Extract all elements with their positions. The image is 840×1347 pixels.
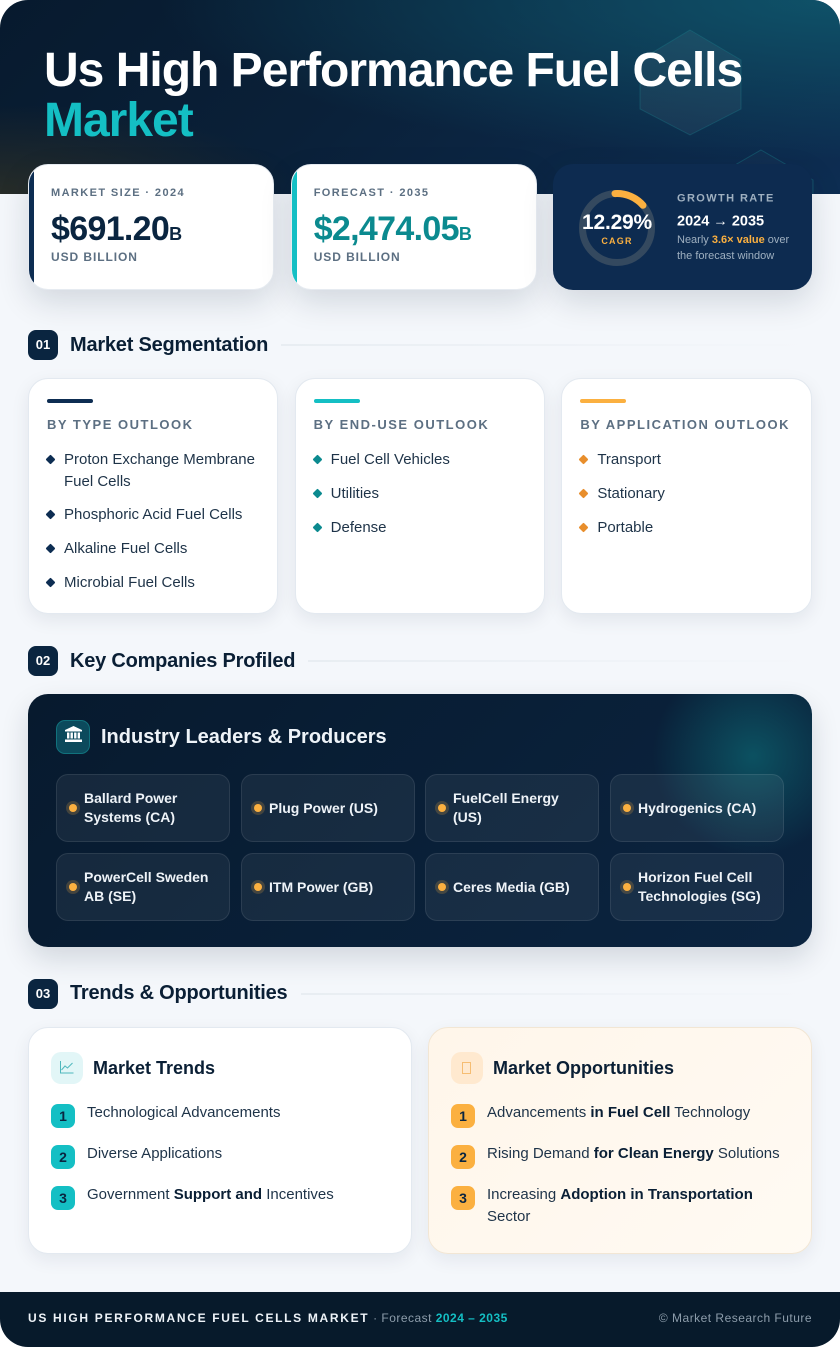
chart: CAGR ring <box>579 190 655 266</box>
panel: market opportunities: Advancements in Fuel Cell Technology <box>487 1104 750 1121</box>
stat card: market size: MARKET SIZE · 2024 <box>51 187 185 199</box>
panel: type outlook: Microbial Fuel Cells <box>64 574 195 591</box>
heading: market segmentation: Market Segmentation <box>70 334 268 356</box>
company chip <box>56 853 230 921</box>
panel: market trends: 2 <box>59 1149 67 1165</box>
stat card: market size: USD BILLION <box>51 250 138 264</box>
icon: decorative hexagons <box>640 30 814 194</box>
footer bar <box>0 1292 840 1347</box>
card title: Market Opportunities <box>493 1058 674 1078</box>
panel: market trends: Technological Advancements <box>87 1104 280 1121</box>
panel: market trends <box>28 1027 412 1254</box>
growth note: the forecast window <box>677 250 774 262</box>
section number 01 <box>28 330 58 360</box>
company chip: Ceres Media (GB) <box>453 878 570 894</box>
panel: type outlook: Fuel Cells <box>64 472 131 490</box>
section number 03 <box>28 979 58 1009</box>
company chip <box>610 853 784 921</box>
header banner <box>0 0 840 194</box>
panel: application outlook: BY APPLICATION OUTLOOK <box>580 417 790 432</box>
panel: application outlook: Transport <box>597 451 661 468</box>
company chip <box>56 774 230 842</box>
CAGR label: CAGR <box>601 236 633 246</box>
company chip: FuelCell Energy (US) <box>453 790 559 825</box>
heading: key companies: Key Companies Profiled <box>70 650 295 672</box>
panel: type outlook: Alkaline Fuel Cells <box>64 540 187 557</box>
section number 01: 01 <box>36 337 50 352</box>
footer title: US HIGH PERFORMANCE FUEL CELLS MARKET · Forecast 2024 – 2035 <box>28 1311 508 1325</box>
panel: end-use outlook: Defense <box>331 519 387 536</box>
section number 02 <box>28 646 58 676</box>
stat card: market size <box>28 164 274 290</box>
company chip <box>425 774 599 842</box>
growth note <box>677 234 789 262</box>
panel: market opportunities: Rising Demand for Clean Energy Solutions <box>487 1145 780 1162</box>
panel: type outlook: Proton Exchange Membrane <box>64 451 255 468</box>
panel: application outlook: Portable <box>597 519 653 536</box>
panel: market trends: 3 <box>59 1190 67 1206</box>
panel: market trends: Government Support and Incentives <box>87 1186 334 1203</box>
stat card: growth rate <box>553 164 812 290</box>
panel: application outlook: Stationary <box>597 485 665 502</box>
panel: type outlook: BY TYPE OUTLOOK <box>47 417 194 432</box>
panel: end-use outlook: Utilities <box>331 485 379 502</box>
title: Us High Performance Fuel Cells <box>44 44 742 97</box>
panel heading: Industry Leaders & Producers <box>101 726 387 748</box>
section number 02: 02 <box>36 653 50 668</box>
panel: end-use outlook <box>295 378 545 614</box>
panel: market opportunities: 3 <box>459 1190 467 1206</box>
panel: end-use outlook: BY END-USE OUTLOOK <box>314 417 489 432</box>
opportunity items: 1 <box>459 1108 467 1124</box>
panel: market opportunities <box>428 1027 812 1254</box>
company chip: ITM Power (GB) <box>269 878 373 894</box>
company chip: Ballard Power Systems (CA) <box>84 790 177 825</box>
growth note: Nearly 3.6× value over <box>677 234 789 246</box>
panel: market opportunities: Increasing Adoption in Transportation <box>487 1186 753 1203</box>
panel: market trends: Diverse Applications <box>87 1145 222 1162</box>
trend items <box>51 1104 75 1128</box>
company chip <box>425 853 599 921</box>
panel: end-use outlook: Fuel Cell Vehicles <box>331 451 450 468</box>
panel: type outlook <box>28 378 278 614</box>
stat card: forecast: FORECAST · 2035 <box>314 187 429 199</box>
panel: application outlook <box>561 378 812 614</box>
icon: missing glyph <box>451 1052 483 1084</box>
company chip: PowerCell Sweden AB (SE) <box>84 869 208 904</box>
icon: chart <box>51 1052 83 1084</box>
CAGR value: 12.29% <box>582 211 652 234</box>
company chip: Hydrogenics (CA) <box>638 800 756 816</box>
opportunity items <box>451 1104 475 1128</box>
company chip: Horizon Fuel Cell Technologies (SG) <box>638 869 761 904</box>
stat card: forecast <box>291 164 537 290</box>
company chip <box>241 774 415 842</box>
panel: market opportunities: Sector <box>487 1208 530 1225</box>
trend items: 1 <box>59 1108 67 1124</box>
panel: industry leaders <box>28 694 812 947</box>
heading: trends: Trends & Opportunities <box>70 982 287 1004</box>
title <box>44 44 742 147</box>
growth years: 2024 → 2035 <box>677 214 764 230</box>
footer credit: © Market Research Future <box>659 1311 812 1325</box>
section number 03: 03 <box>36 986 50 1001</box>
title: Market <box>44 94 193 147</box>
icon: bank <box>56 720 90 754</box>
stat card: market size: $691.20B <box>51 210 182 248</box>
panel: market opportunities: 2 <box>459 1149 467 1165</box>
panel: type outlook: Phosphoric Acid Fuel Cells <box>64 506 242 523</box>
company chip: Plug Power (US) <box>269 800 378 816</box>
card title: Market Trends <box>93 1058 215 1078</box>
growth label: GROWTH RATE <box>677 192 775 204</box>
stat card: forecast: $2,474.05B <box>314 210 472 248</box>
stat card: forecast: USD BILLION <box>314 250 401 264</box>
company chip <box>610 774 784 842</box>
company chip <box>241 853 415 921</box>
